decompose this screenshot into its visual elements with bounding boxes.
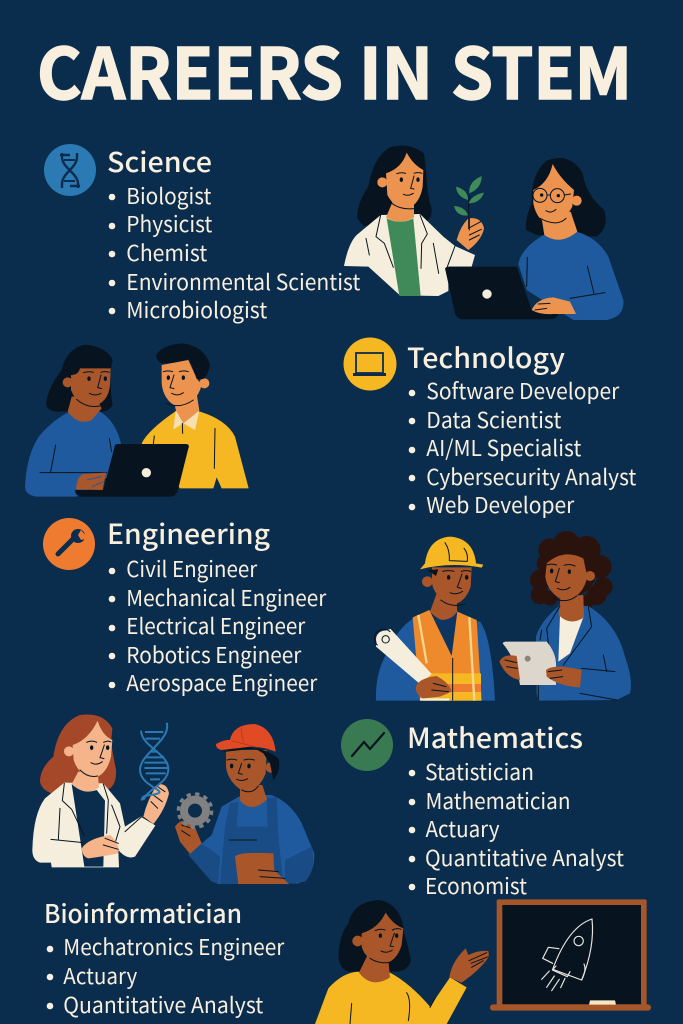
icon: dna helix (140, 723, 168, 801)
construction worker (374, 537, 495, 701)
list: science careers: Environmental Scientist (126, 265, 360, 297)
heading: mathematics: Mathematics (407, 716, 583, 756)
laptop (75, 444, 189, 497)
list: additional careers (47, 930, 285, 1020)
list: mathematics careers: Economist (425, 869, 527, 901)
list: technology careers: Cybersecurity Analyst (426, 460, 636, 492)
woman in blue sweater (25, 345, 122, 497)
panel: additional careers (44, 894, 285, 1020)
list: engineering careers: Civil Engineer (126, 552, 258, 584)
panel: technology (344, 336, 636, 520)
woman in lab coat (32, 714, 169, 867)
blackboard with rocket (490, 899, 651, 1011)
list: technology careers: Data Scientist (426, 403, 561, 435)
rocket (542, 919, 593, 991)
illustration: construction worker and woman with tablet (374, 531, 631, 701)
panel: mathematics (341, 716, 624, 901)
heading: science: Science (107, 140, 212, 180)
title: STEM (451, 19, 632, 120)
list: mathematics careers: Quantitative Analyst (425, 841, 624, 873)
list: mathematics careers: Actuary (426, 812, 500, 844)
list: mathematics careers: Mathematician (426, 784, 570, 816)
teacher (315, 900, 489, 1024)
list: science careers: Physicist (126, 207, 212, 239)
man in yellow sweater (142, 343, 249, 488)
list: technology careers: Software Developer (426, 374, 620, 406)
gear (178, 794, 212, 827)
list: engineering careers: Electrical Engineer (126, 609, 306, 641)
list: technology careers (409, 374, 636, 520)
icon: line chart (341, 719, 393, 771)
list: engineering careers: Robotics Engineer (126, 638, 302, 670)
scientist (344, 145, 484, 296)
list: engineering careers: Mechanical Engineer (126, 581, 327, 613)
illustration: two people at laptop (25, 343, 249, 497)
panel: science (44, 140, 360, 325)
list: mathematics careers: Statistician (425, 755, 534, 787)
woman with curly hair (499, 531, 631, 701)
list: science careers: Biologist (126, 179, 211, 211)
plant sprig (454, 176, 484, 227)
list: engineering careers (109, 552, 327, 698)
list: technology careers: AI/ML Specialist (426, 431, 581, 463)
list: additional careers: Actuary (63, 959, 138, 991)
icon: dna (44, 144, 96, 196)
list: mathematics careers (409, 755, 624, 901)
list: additional careers: Mechatronics Engineer (63, 930, 285, 962)
heading: bioinformatician: Bioinformatician (44, 894, 242, 931)
list: additional careers: Quantitative Analyst (63, 988, 263, 1020)
panel: engineering (43, 512, 327, 698)
list: science careers: Microbiologist (126, 293, 267, 325)
laptop (445, 267, 576, 319)
title: CAREERS (37, 19, 343, 120)
icon: wrench (43, 518, 95, 570)
title: IN (359, 19, 433, 120)
woman with glasses (518, 158, 623, 320)
illustration: scientist with plant and woman at laptop (344, 145, 623, 320)
icon: laptop (344, 338, 396, 390)
worker (175, 724, 314, 884)
illustration: scientist with DNA and worker with gear (32, 714, 314, 884)
illustration: teacher at blackboard (315, 899, 651, 1024)
title (37, 19, 632, 120)
list: science careers (109, 179, 360, 325)
list: engineering careers: Aerospace Engineer (126, 666, 318, 698)
list: science careers: Chemist (126, 236, 207, 268)
heading: technology: Technology (407, 336, 565, 376)
list: technology careers: Web Developer (426, 488, 575, 520)
heading: engineering: Engineering (107, 512, 270, 552)
